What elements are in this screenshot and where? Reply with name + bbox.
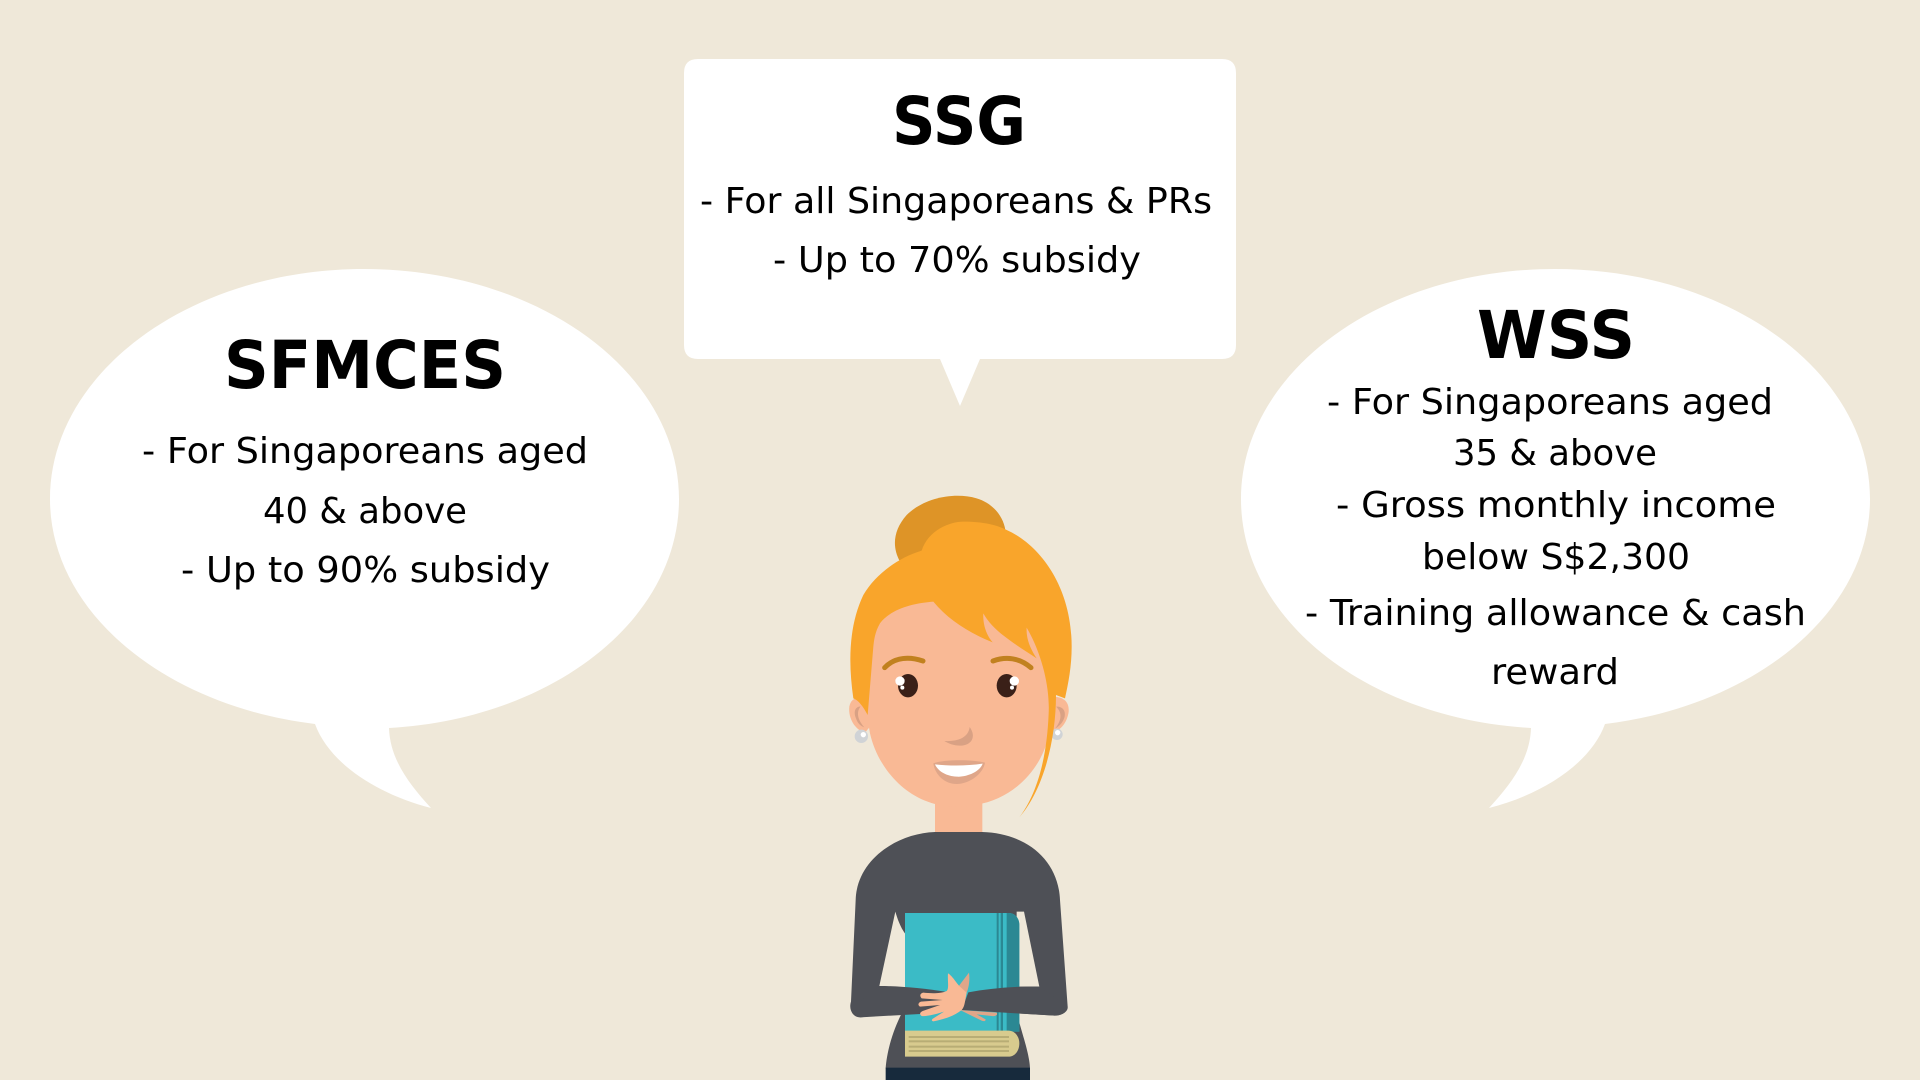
gap between right arm and torso [1017, 912, 1039, 987]
gap between left arm and torso [879, 912, 905, 987]
text block: WSS details: - Gross monthly income [1336, 485, 1776, 526]
heading: SSG: SSG [892, 83, 1026, 160]
left ear [849, 699, 870, 733]
bubble shape: WSS [1241, 269, 1870, 808]
hair bun [895, 496, 1005, 567]
panel: WSS speech bubble [1241, 269, 1870, 808]
text block: SFMCES details [142, 431, 588, 591]
right earring [1051, 729, 1063, 740]
face [867, 596, 1050, 807]
text block: SSG details [700, 181, 1212, 281]
bubble shape: SFMCES [50, 269, 679, 808]
hair [850, 522, 1072, 817]
left eye [895, 674, 918, 697]
panel: SSG speech box [684, 59, 1236, 406]
back hand [958, 973, 997, 1021]
box shape: SSG [684, 59, 1236, 406]
text block: SSG details: - Up to 70% subsidy [773, 240, 1141, 281]
text block: WSS details: - Training allowance & cash [1305, 593, 1806, 634]
text block: WSS details: - For Singaporeans aged [1327, 382, 1773, 423]
text block: WSS details: 35 & above [1453, 433, 1657, 474]
text block: SSG details: - For all Singaporeans & PRs [700, 181, 1212, 222]
text block: WSS details: reward [1491, 652, 1619, 693]
figure head [849, 496, 1072, 817]
inner ears [855, 706, 1065, 728]
text block: SFMCES details: - For Singaporeans aged [142, 431, 588, 472]
right ear [1052, 697, 1069, 733]
text block: WSS details [1305, 382, 1806, 693]
left earring [855, 730, 868, 743]
heading: WSS: WSS [1477, 297, 1635, 374]
trousers [886, 1068, 1030, 1080]
eyebrows [885, 658, 1031, 668]
nose [944, 727, 973, 746]
sweater [850, 832, 1068, 1068]
right eye [997, 674, 1019, 697]
text block: WSS details: below S$2,300 [1422, 537, 1690, 578]
book [905, 913, 1019, 1057]
forearms [853, 986, 1068, 1017]
mouth [933, 760, 985, 784]
front hand [918, 973, 967, 1021]
text block: SFMCES details: 40 & above [263, 491, 467, 532]
text block: SFMCES details: - Up to 90% subsidy [181, 550, 550, 591]
panel: SFMCES speech bubble [50, 269, 679, 808]
illustration: woman holding a book [849, 496, 1072, 1080]
neck [935, 800, 982, 833]
heading: SFMCES: SFMCES [224, 327, 506, 404]
figure body [850, 800, 1068, 1080]
